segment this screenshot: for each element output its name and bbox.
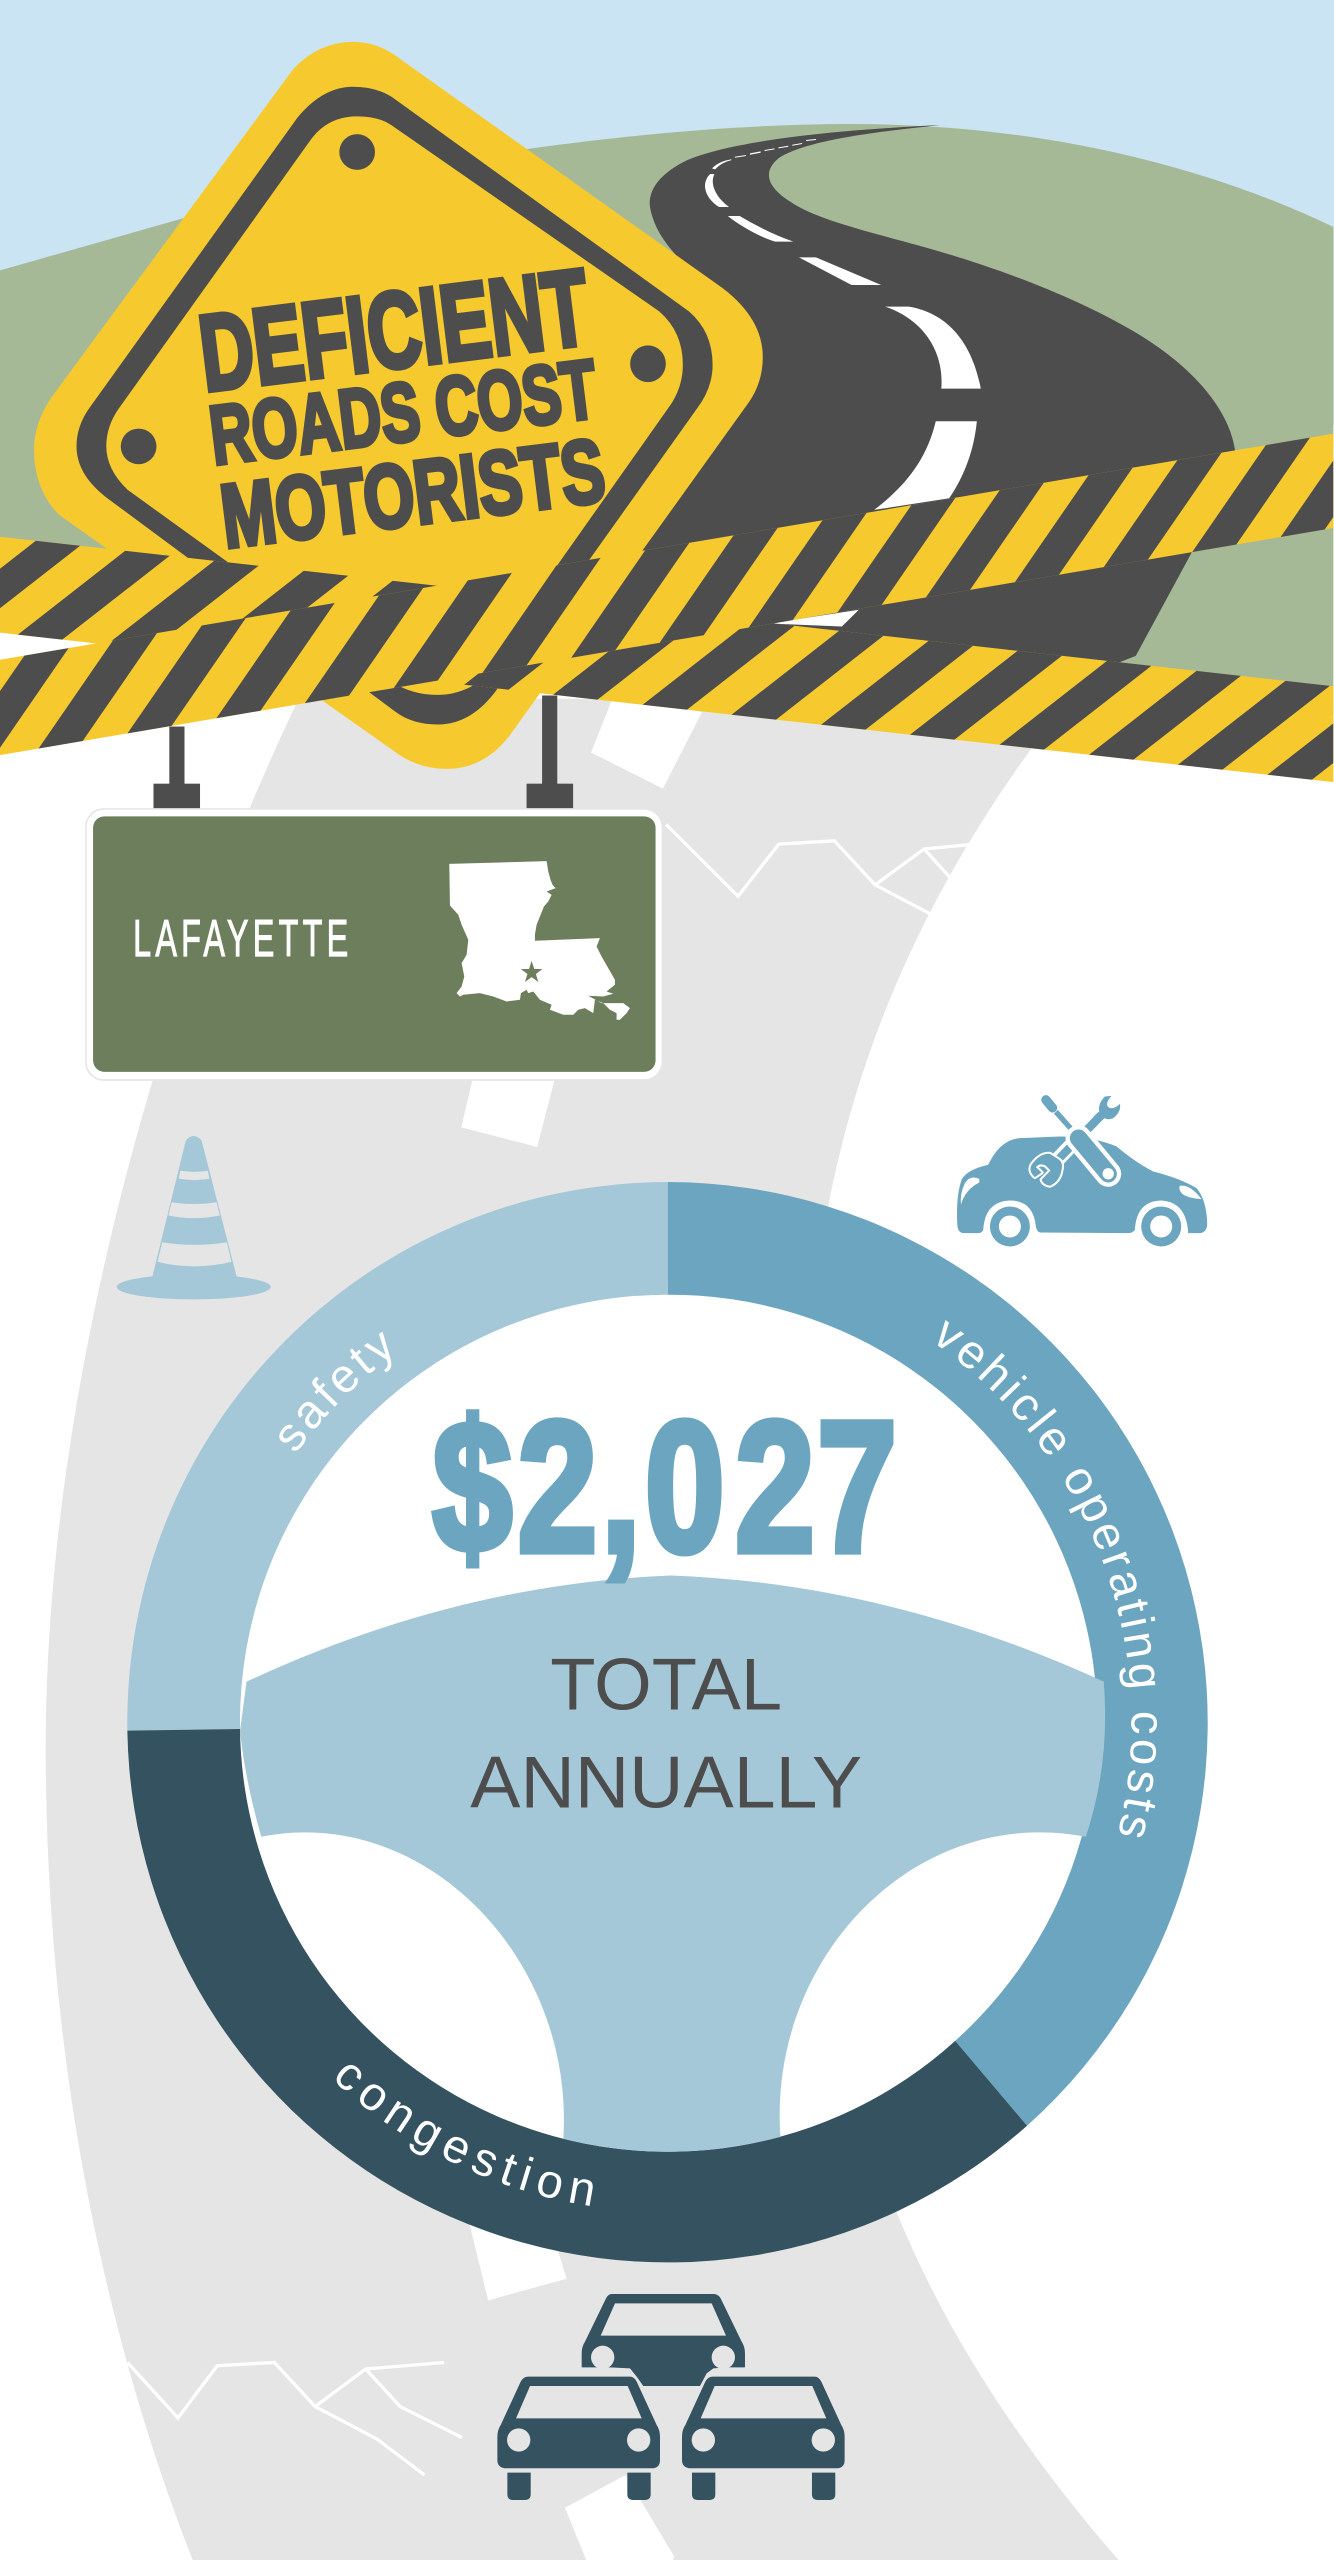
city name: LAFAYETTE <box>133 910 353 968</box>
total annually label <box>470 1642 862 1823</box>
yellow diamond warning sign <box>34 42 763 769</box>
sign hangers <box>153 696 573 810</box>
curved segment labels: congestion <box>336 2065 593 2206</box>
caution tape: descending <box>0 536 1334 782</box>
segment: safety <box>127 1182 668 1731</box>
total amount: $2,027 <box>432 1384 897 1591</box>
segment: vehicle operating costs <box>668 1182 1208 2126</box>
caution tape: rising <box>0 434 1334 756</box>
icon: Louisiana map <box>449 861 630 1020</box>
steering wheel spokes <box>240 1576 1105 2152</box>
curved segment labels <box>279 1320 1158 2206</box>
sign headline <box>193 246 610 568</box>
winding asphalt road <box>596 125 1235 664</box>
front left car <box>497 2377 660 2500</box>
white gap between road and tape <box>770 610 859 627</box>
total annually label: TOTAL <box>550 1642 782 1725</box>
sign headline: DEFICIENT <box>193 246 595 414</box>
icon: traffic cone <box>117 1136 271 1299</box>
back car <box>582 2294 745 2386</box>
sign headline: MOTORISTS <box>215 421 610 568</box>
icon: car with tools <box>957 1096 1207 1246</box>
screwdriver <box>1046 1100 1114 1179</box>
curved segment labels: vehicle operating costs <box>938 1320 1158 1838</box>
steering wheel donut chart <box>127 1182 1208 2262</box>
pavement crack: lower <box>127 2362 462 2475</box>
grey foreground road <box>46 699 1118 2560</box>
total annually label: ANNUALLY <box>470 1740 862 1823</box>
segment: congestion <box>127 1729 1027 2262</box>
panel: Lafayette road sign <box>86 809 662 1080</box>
wrench <box>1030 1096 1120 1186</box>
road centre line dashes <box>705 139 981 510</box>
sign headline: ROADS COST <box>205 342 602 482</box>
front right car <box>682 2377 845 2500</box>
curved segment labels: safety <box>279 1332 392 1450</box>
icon: three cars in traffic <box>497 2294 845 2500</box>
sky and hill background <box>0 0 1334 714</box>
pavement crack: upper <box>666 824 975 918</box>
